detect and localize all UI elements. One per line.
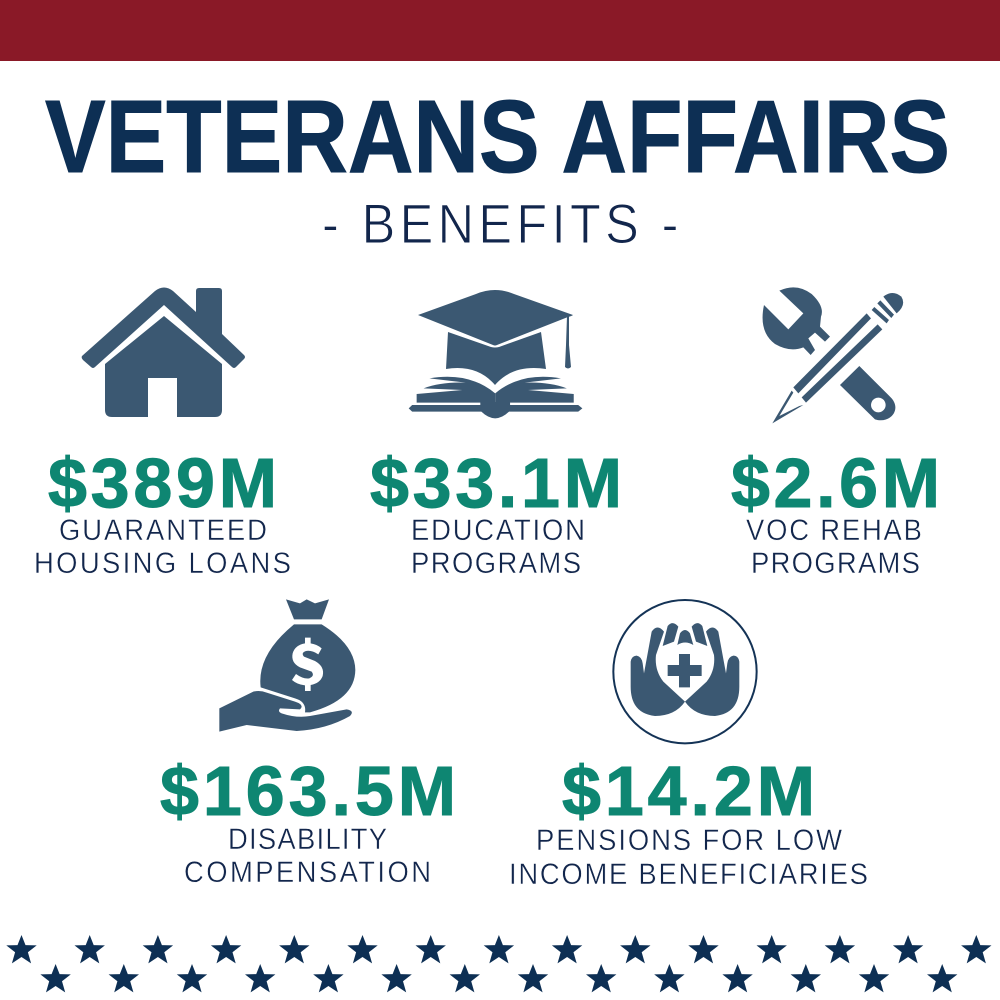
- icon: money bag in hand: [219, 599, 355, 732]
- subtitle: - BENEFITS -: [322, 194, 678, 256]
- stat: voc rehab programs: $2.6M: [731, 444, 940, 522]
- icon: hands holding medical cross in circle: [613, 600, 757, 743]
- stat: disability compensation: $163.5M: [160, 752, 456, 830]
- stat: voc rehab programs: VOC REHAB: [746, 514, 922, 547]
- stat: pensions: [509, 752, 868, 891]
- stat: voc rehab programs: PROGRAMS: [751, 547, 920, 580]
- top banner: [0, 0, 1000, 61]
- stat: voc rehab programs: [731, 444, 940, 580]
- stat: pensions: INCOME BENEFICIARIES: [509, 858, 868, 891]
- stat: disability compensation: DISABILITY: [228, 823, 387, 856]
- icon: wrench and pencil: [763, 287, 903, 423]
- stat: education programs: $33.1M: [370, 444, 622, 522]
- stat: disability compensation: [160, 752, 456, 889]
- stat: disability compensation: COMPENSATION: [184, 856, 431, 889]
- stat: housing loans: GUARANTEED: [59, 514, 267, 547]
- stat: housing loans: $389M: [48, 444, 277, 522]
- stat: education programs: EDUCATION: [411, 514, 585, 547]
- stat: pensions: $14.2M: [562, 752, 815, 830]
- stat: education programs: PROGRAMS: [411, 547, 581, 580]
- stat: housing loans: HOUSING LOANS: [34, 547, 291, 580]
- row of stars: [6, 935, 992, 992]
- stat: education programs: [370, 444, 622, 580]
- stat: pensions: PENSIONS FOR LOW: [536, 824, 842, 857]
- icon: house: [82, 288, 245, 417]
- stat: housing loans: [34, 444, 291, 580]
- icon: graduation cap on open book: [409, 290, 582, 418]
